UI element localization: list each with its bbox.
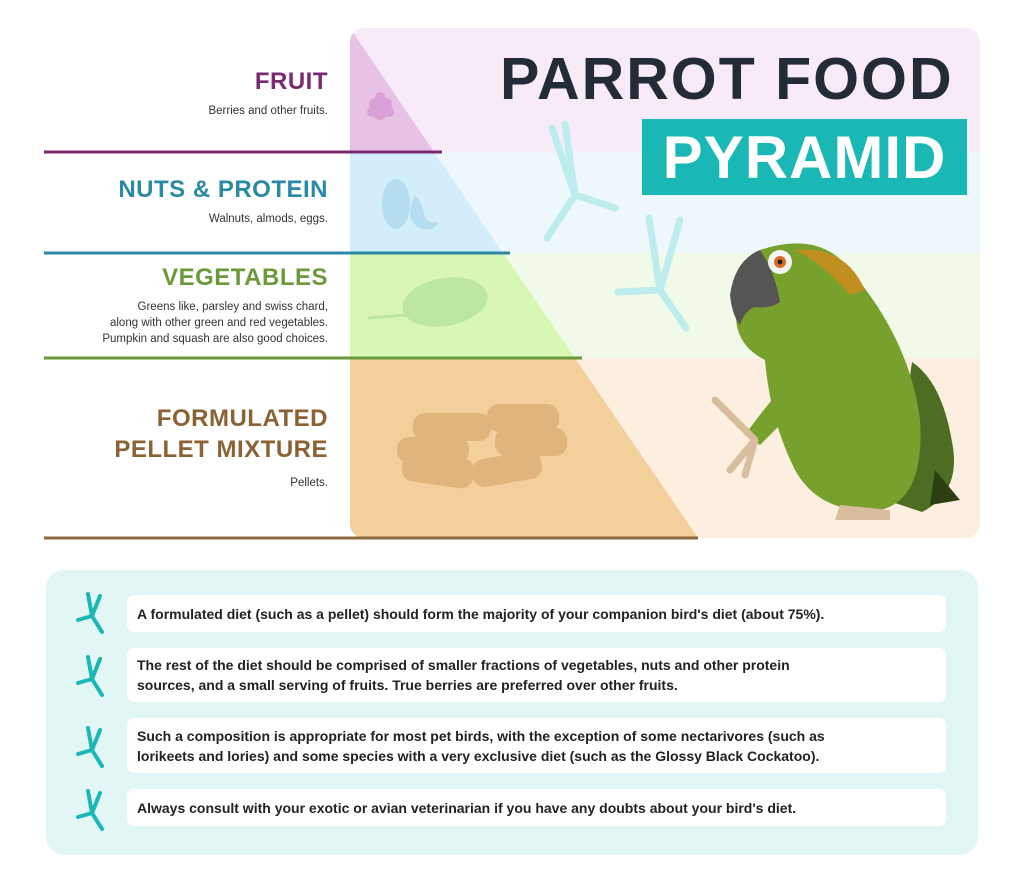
tip 4 bbox=[127, 789, 946, 826]
label: nuts & protein: NUTS & PROTEIN bbox=[118, 176, 328, 203]
label: vegetables bbox=[102, 264, 328, 345]
title: PARROT FOOD bbox=[500, 46, 954, 112]
icon: footprint 4 bbox=[76, 789, 104, 831]
label: vegetables: Greens like, parsley and swiss chard, bbox=[138, 301, 328, 313]
icon: pellets bbox=[397, 404, 567, 490]
tip 2: sources, and a small serving of fruits. True berries are preferred over other fruits. bbox=[137, 677, 678, 693]
icon: raspberry bbox=[367, 92, 394, 120]
pyramid and parrot panel bbox=[44, 28, 980, 540]
icon: nuts bbox=[382, 179, 438, 230]
panel: tips bbox=[46, 570, 978, 855]
label: vegetables: Pumpkin and squash are also good choices. bbox=[102, 333, 328, 345]
tip 1: A formulated diet (such as a pellet) should form the majority of your companion bird's diet (about 75%). bbox=[137, 606, 824, 622]
tip 3: Such a composition is appropriate for most pet birds, with the exception of some nectarivores (such as bbox=[137, 728, 825, 744]
title box: pyramid: PYRAMID bbox=[663, 124, 946, 191]
label: formulated pellet mixture: Pellets. bbox=[290, 477, 328, 489]
divider lines bbox=[44, 150, 442, 154]
tip 1 bbox=[127, 595, 946, 632]
icon: leaf bbox=[368, 271, 492, 333]
icon: footprint 2 bbox=[76, 655, 104, 697]
label: vegetables: VEGETABLES bbox=[162, 264, 328, 291]
label: formulated pellet mixture bbox=[114, 405, 328, 489]
label: fruit bbox=[208, 68, 328, 117]
tip 3: lorikeets and lories) and some species with a very exclusive diet (such as the Glossy Black Cockatoo). bbox=[137, 748, 819, 764]
parrot bbox=[715, 243, 960, 520]
label: nuts & protein: Walnuts, almods, eggs. bbox=[209, 213, 328, 225]
icon: footprint 1 bbox=[76, 592, 104, 634]
tip 2 bbox=[127, 648, 946, 702]
icon: footprints bbox=[547, 124, 686, 328]
label: fruit: FRUIT bbox=[255, 68, 328, 95]
label: fruit: Berries and other fruits. bbox=[208, 105, 328, 117]
tip 3 bbox=[127, 718, 946, 773]
icon: footprint 3 bbox=[76, 726, 104, 768]
label: formulated pellet mixture: PELLET MIXTURE bbox=[114, 436, 328, 463]
label: nuts & protein bbox=[118, 176, 328, 225]
label: vegetables: along with other green and red vegetables. bbox=[110, 317, 328, 329]
tip 2: The rest of the diet should be comprised of smaller fractions of vegetables, nuts and other protein bbox=[137, 657, 790, 673]
label: formulated pellet mixture: FORMULATED bbox=[157, 405, 328, 432]
tip 4: Always consult with your exotic or avian veterinarian if you have any doubts about your bird's diet. bbox=[137, 800, 796, 816]
pyramid bbox=[350, 28, 698, 538]
